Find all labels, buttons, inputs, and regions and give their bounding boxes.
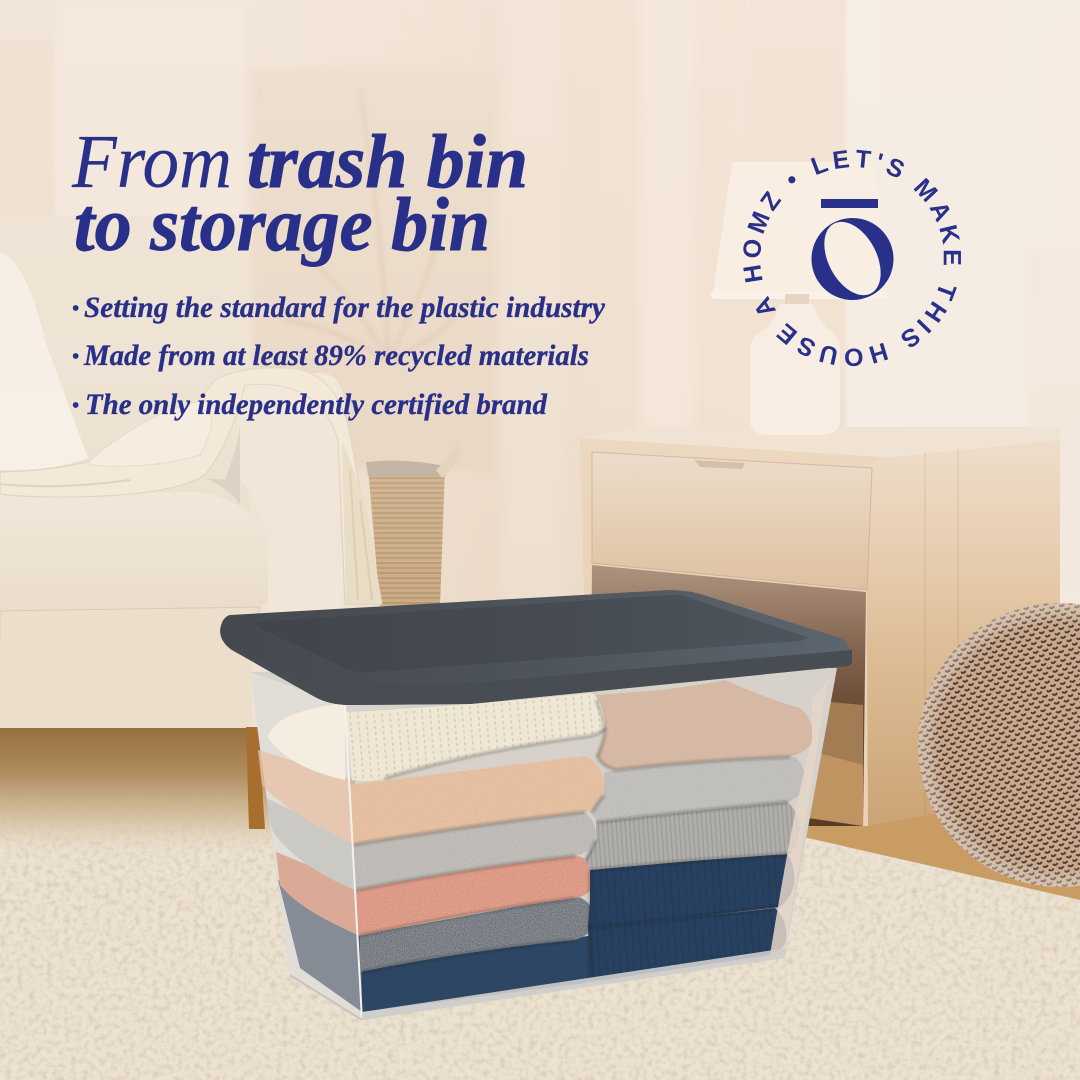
seat cushion bbox=[0, 492, 268, 612]
lid bbox=[220, 590, 852, 705]
navy ribbed sweater bbox=[588, 852, 794, 928]
heading: trash bin bbox=[247, 120, 528, 204]
nightstand bbox=[580, 427, 1060, 826]
ribbed grey sweater bbox=[585, 800, 800, 870]
light grey sweater bbox=[590, 757, 805, 822]
fold shadows between sweaters bbox=[352, 700, 790, 980]
grey sweater bbox=[352, 808, 596, 890]
sofa bbox=[0, 215, 382, 829]
pouf bbox=[918, 603, 1080, 887]
bullet list: • bbox=[72, 346, 79, 368]
pillow bbox=[0, 253, 88, 470]
sofa arm bbox=[236, 373, 345, 612]
bullet list: Setting the standard for the plastic industry bbox=[84, 291, 606, 324]
drawer front bbox=[592, 452, 872, 590]
bullet list: • bbox=[72, 298, 79, 320]
knit throw blanket bbox=[0, 368, 382, 604]
sofa base bbox=[0, 627, 252, 728]
logo mark bbox=[812, 199, 894, 300]
tan sweater bbox=[595, 680, 813, 770]
sofa leg bbox=[246, 727, 265, 829]
storage bin bbox=[220, 590, 852, 1020]
folded clothes: right stack bbox=[585, 680, 813, 982]
navy ribbed sweater lower bbox=[588, 908, 786, 982]
heading bbox=[71, 120, 528, 267]
side folds seen through plastic bbox=[258, 703, 362, 1012]
logo badge bbox=[743, 150, 961, 366]
bullet list: The only independently certified brand bbox=[85, 388, 548, 421]
bullet list: • bbox=[72, 395, 79, 417]
bin back and body bbox=[250, 668, 837, 1020]
bullet list bbox=[72, 291, 606, 421]
lamp bbox=[711, 162, 887, 435]
soft light wash over upper scene bbox=[0, 0, 1080, 640]
sofa back bbox=[0, 215, 250, 515]
charcoal sweater bbox=[360, 896, 594, 972]
folded clothes: left stack bbox=[258, 693, 607, 1012]
rug bbox=[0, 770, 1080, 1080]
heading: to storage bin bbox=[74, 183, 490, 267]
navy sweater bbox=[362, 935, 595, 1012]
woven basket bbox=[366, 442, 463, 606]
cream ribbed sweater bbox=[345, 693, 607, 781]
translucent plastic side panels bbox=[250, 670, 837, 1020]
bullet list: Made from at least 89% recycled materials bbox=[83, 339, 589, 372]
background: room wall and curtains bbox=[0, 0, 1080, 800]
salmon sweater bbox=[356, 855, 595, 936]
heading: From bbox=[71, 120, 232, 204]
floor under sofa bbox=[0, 728, 360, 858]
circular tagline: LET'S MAKE THIS HOUSE A HOMZ • bbox=[743, 150, 961, 366]
peach sweater bbox=[350, 756, 604, 845]
